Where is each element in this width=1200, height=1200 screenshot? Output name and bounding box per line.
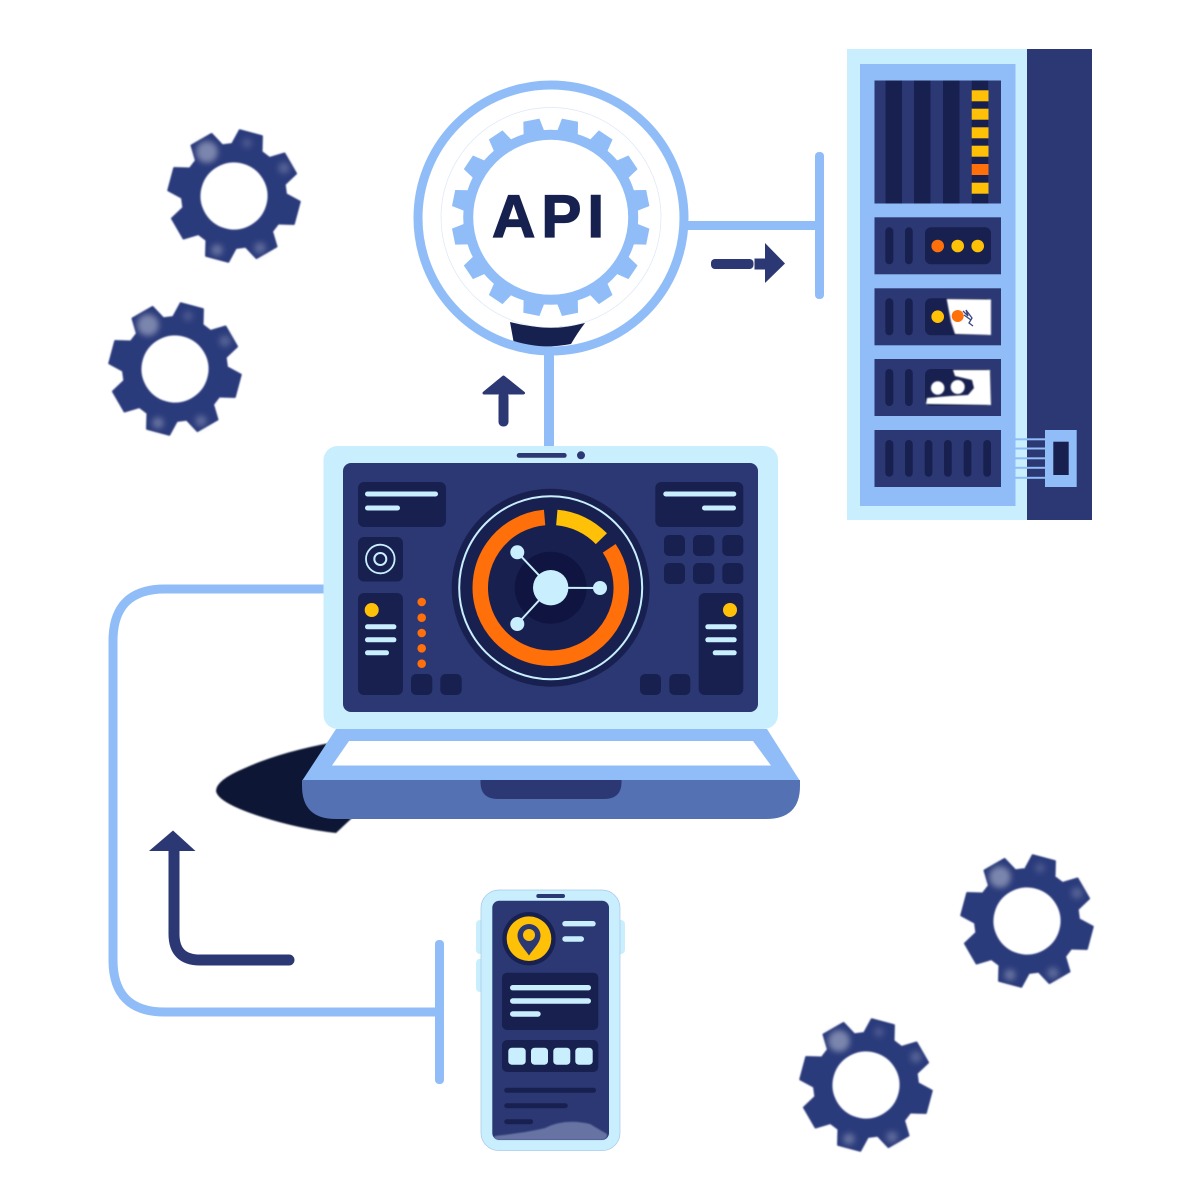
connector: API to laptop [544, 350, 554, 448]
smartphone [476, 890, 625, 1151]
badge thin ring [441, 108, 661, 328]
server rack [847, 49, 1092, 520]
phone screen smudge [494, 1122, 607, 1140]
icon: gear middle left [95, 284, 260, 452]
icon: gear top left [154, 111, 320, 280]
laptop camera [577, 451, 585, 459]
central dial [452, 489, 650, 687]
phone side buttons [476, 920, 625, 992]
target icon [358, 537, 403, 582]
dial orange arc [480, 518, 621, 658]
laptop camera bar [517, 453, 567, 458]
phone speaker [536, 894, 565, 898]
phone screen [492, 901, 609, 1140]
bottom right buttons [640, 674, 690, 695]
phone header lines [562, 921, 596, 942]
text panel top left [358, 482, 446, 527]
connector: laptop to phone [113, 589, 439, 1012]
phone footer lines [504, 1088, 596, 1124]
dial network hub [510, 545, 607, 631]
server unit 1 [874, 217, 1001, 274]
button grid [664, 535, 743, 584]
arrow: right to server [711, 243, 785, 283]
phone text card [502, 973, 598, 1030]
badge outer ring [418, 85, 684, 351]
server inner frame [860, 64, 1016, 506]
laptop [216, 446, 800, 833]
badge dark blob [510, 322, 585, 346]
laptop screen [343, 463, 758, 712]
dial yellow arc [557, 518, 601, 539]
phone tile row [502, 1040, 598, 1072]
arrow: phone up to laptop [149, 830, 289, 960]
server unit 4 [874, 430, 1001, 487]
right status panel [699, 593, 743, 695]
arrow: up to API [484, 377, 524, 426]
laptop base [302, 780, 800, 819]
laptop keyboard deck [302, 729, 800, 781]
server unit 2 [874, 288, 1001, 345]
laptop keyboard opening [332, 741, 771, 766]
left status panel [358, 593, 403, 695]
phone body [481, 890, 620, 1151]
server side panel [1027, 49, 1092, 520]
laptop trackpad notch [480, 780, 622, 799]
badge label: API [492, 183, 610, 250]
text panel top right [655, 482, 743, 527]
laptop lid [324, 446, 778, 729]
server port connector [1015, 430, 1077, 487]
server top bay [874, 80, 1001, 204]
location pin badge [502, 912, 556, 965]
connector end bar: server [815, 152, 824, 299]
server unit 3 [874, 359, 1001, 416]
server front frame [847, 49, 1027, 520]
laptop shadow [216, 742, 352, 833]
orange indicator dots [417, 598, 426, 668]
connector end bar: phone [435, 940, 444, 1084]
icon: gear bottom right [786, 1000, 952, 1168]
bottom left buttons [411, 674, 462, 695]
icon: gear lower right [947, 836, 1112, 1004]
connector: API to server [686, 221, 819, 230]
badge gear [452, 118, 650, 316]
API badge [418, 85, 684, 351]
